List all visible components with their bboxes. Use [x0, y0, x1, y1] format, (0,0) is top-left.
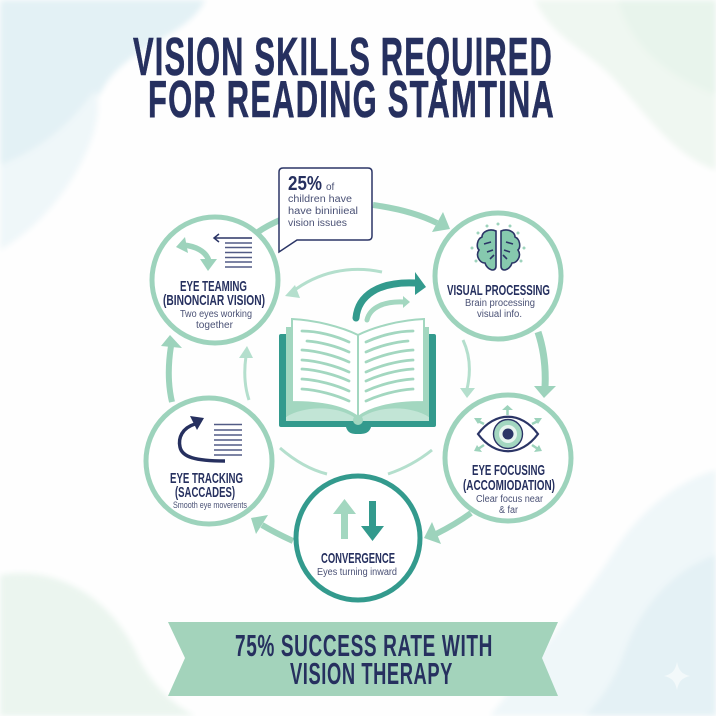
banner: [168, 622, 558, 696]
icon: sparkle: [664, 662, 690, 690]
panel: eye teaming: [152, 217, 278, 343]
description: Eyes turning inward: [317, 567, 397, 578]
callout: 25% statistic: vision issues: [288, 218, 347, 229]
heading: (SACCADES): [175, 484, 235, 501]
icon: swap arrows and lines: [176, 234, 252, 271]
description: Brain processing: [465, 298, 535, 309]
heading: EYE FOCUSING: [472, 462, 545, 479]
inner cycle arrows: [239, 269, 475, 474]
description: Clear focus near: [476, 494, 544, 505]
description: visual info.: [477, 309, 522, 320]
heading: VISUAL PROCESSING: [447, 282, 550, 299]
description: & far: [499, 505, 519, 516]
panel: visual processing: [435, 213, 561, 339]
heading: [170, 470, 243, 501]
outer cycle arrows: [161, 205, 556, 544]
arrow: dark teal arrow out of book: [356, 272, 426, 318]
heading: (ACCOMIODATION): [463, 477, 555, 494]
icon: brain: [470, 222, 526, 270]
heading: (BINONCIAR VISION): [163, 292, 265, 309]
heading: CONVERGENCE: [321, 550, 395, 567]
icon: curved arrow and lines: [180, 416, 242, 461]
description: [476, 494, 544, 516]
heading: [163, 278, 265, 309]
panel: eye tracking: [146, 398, 272, 524]
panel: eye focusing: [445, 395, 571, 521]
panel: convergence: [296, 476, 420, 600]
callout: 25% statistic: children have: [288, 194, 352, 205]
description: [465, 298, 535, 320]
central book: [279, 319, 436, 434]
description: together: [196, 320, 234, 331]
callout: 25% statistic: 25%: [288, 173, 322, 195]
heading: EYE TEAMING: [180, 278, 247, 295]
callout: 25% statistic: of: [326, 182, 335, 193]
description: [180, 309, 252, 331]
arrow: light arrow out of book: [367, 296, 410, 320]
description: Two eyes working: [180, 309, 252, 320]
title: [133, 27, 555, 129]
heading: [463, 462, 555, 494]
icon: eye with arrows: [474, 405, 542, 452]
banner: VISION THERAPY: [290, 656, 453, 691]
callout: 25% statistic: have bininiieal: [288, 206, 358, 217]
heading: EYE TRACKING: [170, 470, 243, 487]
banner: 75% SUCCESS RATE WITH: [235, 628, 493, 663]
description: Smooth eye moverents: [173, 500, 247, 511]
icon: opposing arrows: [333, 499, 384, 541]
callout: 25% statistic: [279, 168, 372, 252]
